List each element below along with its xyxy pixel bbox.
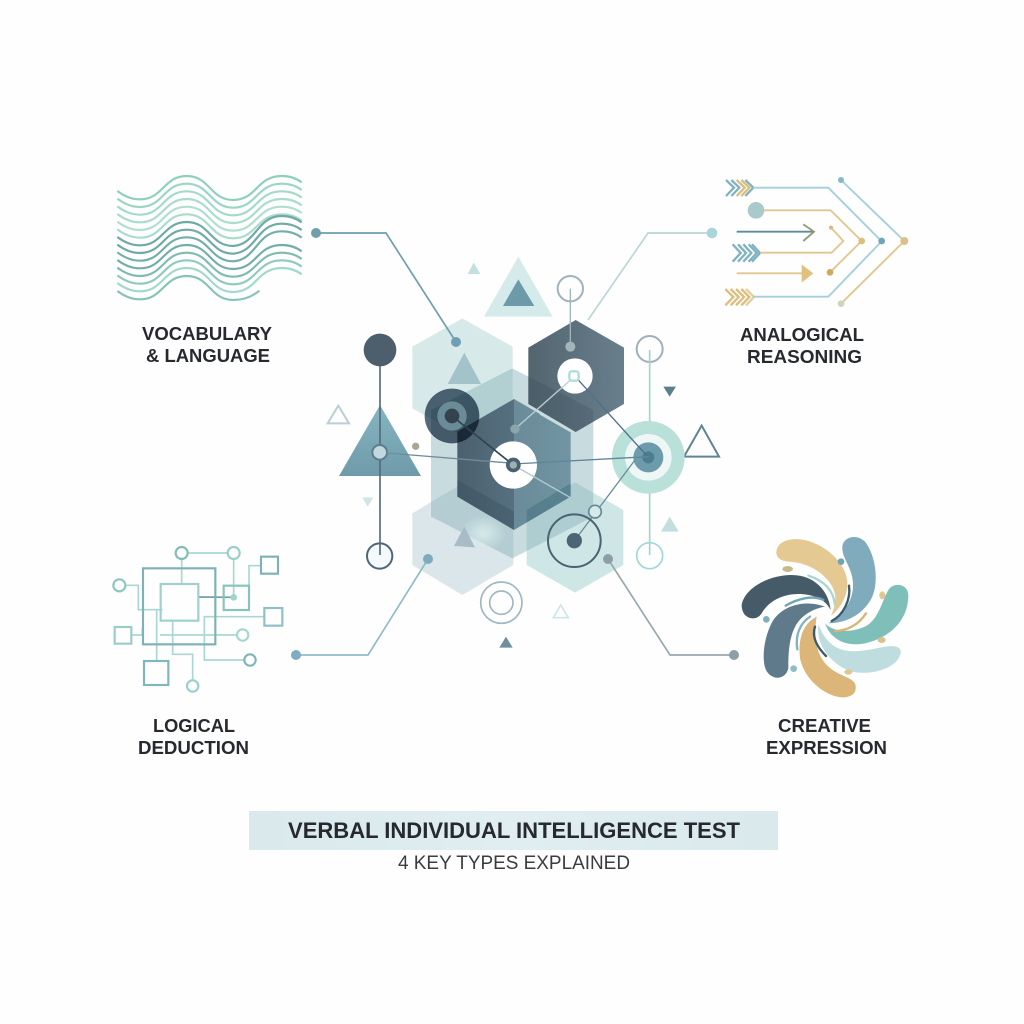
subtitle: 4 KEY TYPES EXPLAINED (398, 852, 630, 874)
heading: creative expression (766, 715, 887, 758)
dark arrow (737, 224, 814, 241)
central white node (490, 441, 537, 489)
heading: vocabulary and language (142, 323, 273, 366)
small triangles (328, 263, 719, 648)
icon: waves (vocabulary) (117, 176, 302, 300)
top hexagon node (557, 276, 593, 394)
heading: logical deduction (138, 715, 249, 758)
concentric rings bottom (481, 582, 522, 623)
title banner (249, 811, 778, 850)
target node right (612, 421, 685, 494)
circuit nodes (113, 547, 256, 692)
icon: swirl (creative expression) (742, 537, 908, 697)
light hexagon bottom right (527, 482, 623, 593)
circuit squares (115, 557, 282, 685)
swirl dots (763, 558, 886, 675)
dark central hexagon (457, 399, 571, 530)
dark hexagon top right (528, 320, 624, 432)
shaded band on top right hexagon (528, 377, 593, 432)
light hexagon bottom left (412, 483, 513, 595)
light hexagon top left (412, 318, 513, 437)
heading: analogical reasoning: REASONING (747, 346, 862, 367)
central hexagon highlight edge (540, 414, 571, 432)
heading: analogical reasoning: ANALOGICAL (740, 324, 864, 345)
swirl petals (742, 537, 908, 697)
heading: creative expression: EXPRESSION (766, 737, 887, 758)
top chevron arrow (726, 180, 881, 240)
swirl accents (786, 576, 866, 656)
middle chevron arrow (733, 226, 843, 262)
soft glow (460, 515, 507, 552)
outer chevron lines (838, 177, 908, 307)
heading: logical deduction: LOGICAL (153, 715, 235, 736)
translucent middle hexagon (431, 368, 593, 558)
connector: logical (291, 554, 433, 660)
dark target node upper left (425, 389, 479, 443)
link nodes (412, 371, 601, 567)
central hexagon network (328, 257, 719, 648)
connector: vocabulary (311, 228, 461, 347)
circuit traces (125, 553, 264, 680)
title: VERBAL INDIVIDUAL INTELLIGENCE TEST (288, 818, 740, 843)
heading: logical deduction: DEDUCTION (138, 737, 249, 758)
shaded band lower right (527, 483, 571, 522)
heading: analogical reasoning (740, 324, 864, 367)
connector: analogical (588, 228, 717, 320)
tan circle line (748, 202, 865, 276)
shaded band lower left (457, 480, 514, 530)
tan arrow (737, 264, 813, 283)
icon: arrows (analogical reasoning) (725, 177, 908, 307)
heading: vocabulary and language: & LANGUAGE (146, 345, 270, 366)
right vertical node stem (637, 336, 663, 569)
heading: vocabulary and language: VOCABULARY (142, 323, 273, 344)
icon: circuit (logical deduction) (113, 547, 282, 692)
network links (387, 376, 648, 540)
heading: creative expression: CREATIVE (778, 715, 871, 736)
connector: creative (603, 554, 739, 660)
top triangle (484, 257, 553, 317)
bottom chevron arrow (725, 242, 881, 305)
left vertical node stem (339, 334, 421, 569)
